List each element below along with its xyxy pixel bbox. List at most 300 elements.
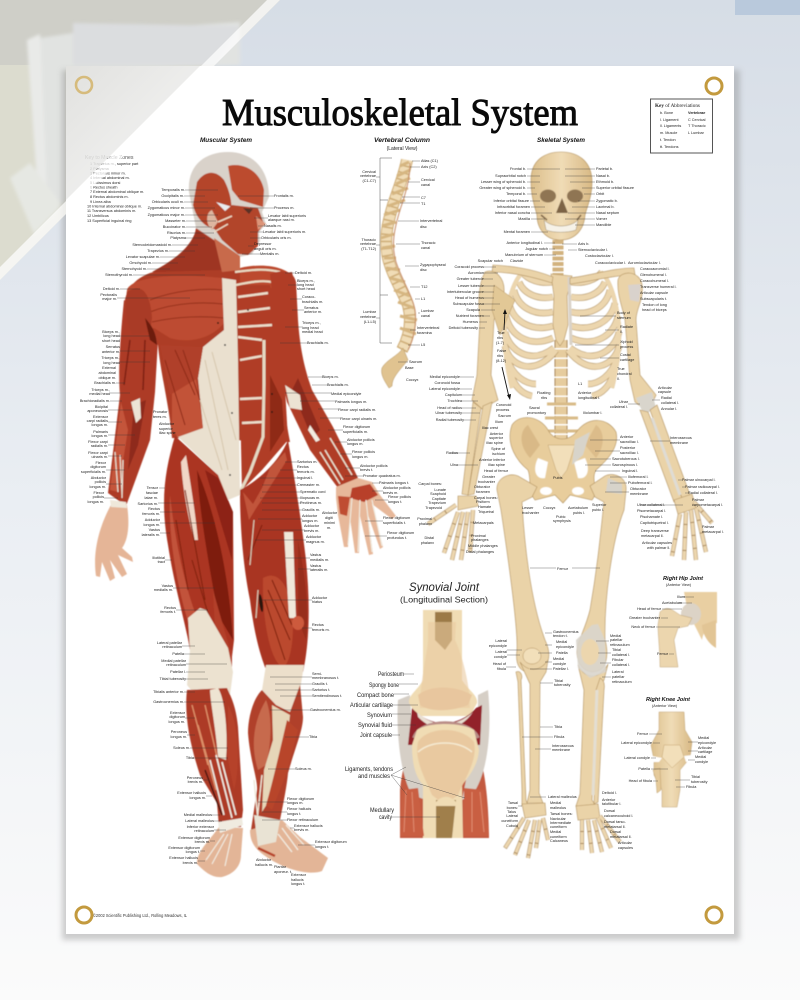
muscular labels: right column: Gastrocnemius m. xyxy=(310,708,341,712)
knee labels: cartilage xyxy=(698,750,712,754)
skeleton labels: Infraorbital foramen xyxy=(497,205,530,209)
muscular labels: left column: Brachioradialis m. xyxy=(80,399,110,403)
skeleton labels: collateral l. xyxy=(612,653,630,657)
muscular labels: right column: Adductor xyxy=(306,535,322,539)
skeleton labels: iliac spine xyxy=(486,441,503,445)
skeleton labels: head of biceps xyxy=(642,308,667,312)
skeleton labels: Maxilla xyxy=(518,217,531,221)
muscular labels: right column: Palmaris longus m. xyxy=(335,400,367,404)
muscular labels: left column: Sternohyoid m. xyxy=(121,267,147,271)
muscular labels: right column: Abductor pollicis xyxy=(347,438,375,442)
muscular labels: left column: femoris m. xyxy=(142,512,160,516)
muscular labels: left column: Patella xyxy=(172,652,185,656)
key of abbreviations: Key of Abbreviations xyxy=(655,102,700,109)
muscular labels: right column: aponeur. t. xyxy=(274,870,292,874)
skeleton labels: Coracoid process xyxy=(454,265,484,269)
skeleton labels: Distal phalanges xyxy=(466,550,494,554)
muscular labels: right column: Palmaris longus t. xyxy=(379,481,409,485)
key to muscle zones: 2 Platysma xyxy=(90,167,110,171)
skeleton labels: Anterior xyxy=(578,391,592,395)
right lower leg bones xyxy=(576,624,620,853)
skeleton labels: Radiate xyxy=(620,325,633,329)
skeleton labels: Dorsal xyxy=(604,809,615,813)
skeleton labels: Pubis xyxy=(553,476,563,480)
skeleton labels: with palmar ll. xyxy=(647,546,670,550)
muscular labels: right column: Rectus xyxy=(297,465,309,469)
muscular labels: left column: Flexor xyxy=(95,461,107,465)
muscular labels: left column: fasciae xyxy=(146,491,158,495)
spine labels: canal xyxy=(421,183,430,187)
key of abbreviations: tt. Tendons xyxy=(660,145,679,149)
skeleton labels: Sacral xyxy=(529,406,540,410)
muscular labels: right column: Flexor digitorum xyxy=(383,516,410,520)
muscular labels: right column: superficialis m. xyxy=(343,430,368,434)
knee labels: Patella xyxy=(638,767,651,771)
skeleton labels: phalanx xyxy=(421,541,434,545)
skeleton labels: Anterior inferior xyxy=(479,458,506,462)
muscular labels: left column: Platysma xyxy=(170,236,187,240)
skeleton labels: Deltoid l. xyxy=(602,791,617,795)
muscular labels: left column: superior xyxy=(159,427,173,431)
skeleton labels: phalanges xyxy=(471,538,489,542)
skeleton labels: Nasal b. xyxy=(596,174,610,178)
muscular labels: right column: hiatus xyxy=(312,600,322,604)
muscular labels: right column: alaeque nasi m. xyxy=(268,218,295,222)
synovial labels: and muscles xyxy=(358,773,390,780)
skeleton labels: Ulnar tuberosity xyxy=(435,411,462,415)
skeleton labels: Axis b. xyxy=(578,242,589,246)
muscular labels: right column: femoris m. xyxy=(297,470,315,474)
skeleton labels: cartilage xyxy=(620,358,634,362)
skeleton labels: Lateral xyxy=(495,650,507,654)
skeleton labels: Medial xyxy=(556,640,567,644)
muscular labels: left column: Buccinator m. xyxy=(163,225,186,229)
skeleton labels: Lacrimal b. xyxy=(596,205,615,209)
muscular labels: left column: Medial patellar xyxy=(161,659,187,663)
skeleton labels: Interosseous xyxy=(552,744,574,748)
muscular labels: left column: longus m. xyxy=(92,434,108,438)
muscular labels: right column: profundus t. xyxy=(387,536,407,540)
muscular labels: right column: Levator labii superioris xyxy=(268,214,306,218)
skeleton labels: Iliofemoral l. xyxy=(628,475,648,479)
skeleton labels: Lateral xyxy=(495,639,507,643)
top-left translucent sheet overlay xyxy=(66,66,200,200)
muscular labels: right column: Triceps m., xyxy=(302,321,321,325)
skeleton labels: Mental foramen xyxy=(504,230,530,234)
muscular labels: right column: anterior m. xyxy=(304,310,322,314)
skeleton labels: Patellar l. xyxy=(553,667,569,671)
hip labels: Ilium xyxy=(677,595,685,599)
muscular labels: left column: Lateral malleolus xyxy=(185,819,214,823)
synovial labels: Articular cartilage xyxy=(350,702,393,709)
skeleton labels xyxy=(417,167,724,850)
muscular labels: right column: Flexor hallucis xyxy=(287,807,311,811)
muscular labels: left column: major m. xyxy=(102,297,117,301)
skeleton labels: Lateral epicondyle xyxy=(429,387,460,391)
grommet: bottom right xyxy=(706,907,722,923)
skeleton labels: Capitulum xyxy=(445,393,462,397)
muscular labels: left column: ulnaris m. xyxy=(92,455,108,459)
key to muscle zones: 7 External abdominal oblique m. xyxy=(90,190,144,194)
skeleton labels: Medial xyxy=(550,801,561,805)
skeleton labels: Hamate xyxy=(478,505,491,509)
skeleton labels: Obturator xyxy=(474,485,491,489)
skeleton labels: talofibular l. xyxy=(602,802,621,806)
skeleton labels: Ilium xyxy=(495,420,503,424)
skeleton labels: foramen xyxy=(476,490,490,494)
muscular labels: right column: m. xyxy=(327,526,331,530)
abdominal muscles xyxy=(160,288,288,490)
skeleton labels: Superior orbital fissure xyxy=(596,186,634,190)
skeleton labels: phalanx xyxy=(419,522,432,526)
knee labels: Tibial xyxy=(691,775,700,779)
muscular labels: left column: abdominal xyxy=(98,371,116,375)
muscular labels: right column: magnus m. xyxy=(306,540,325,544)
skeleton labels: metacarpal ll. xyxy=(641,534,664,538)
skeleton labels: Zygomatic b. xyxy=(596,199,618,203)
skeleton labels: symphysis xyxy=(553,519,571,523)
skeleton labels: Nasal septum xyxy=(596,211,619,215)
muscular labels: left column: Omohyoid m. xyxy=(129,261,152,265)
skeleton labels: Spine of xyxy=(491,447,506,451)
skeleton labels: Pisometacarpal l. xyxy=(637,509,666,513)
skeleton labels: Tarsal bones: xyxy=(550,812,573,816)
muscular labels: left column: Rectus xyxy=(148,507,160,511)
muscular labels: right column: longus t. xyxy=(388,500,402,504)
muscular labels: left column: iliac spine xyxy=(159,431,176,435)
skeleton labels: Head of femur xyxy=(484,469,509,473)
muscular labels: left column: teres m. xyxy=(153,415,167,419)
muscular labels: left column: Triceps m., xyxy=(91,388,110,392)
muscular labels: left column: longus m. xyxy=(92,423,108,427)
synovial heading: Synovial Joint xyxy=(409,580,480,594)
muscular labels: right column: brevis m. xyxy=(304,529,319,533)
muscular labels: left column: latae m. xyxy=(144,496,158,500)
skeleton labels: Manubrium of sternum xyxy=(505,253,543,257)
muscular labels: left column: Tibia xyxy=(186,756,195,760)
key to muscle zones: 10 Internal abdominal oblique m. xyxy=(87,204,142,208)
muscular labels: right column: digiti xyxy=(325,516,333,520)
skeleton labels: Articular capsules xyxy=(642,541,672,545)
muscular labels: right column: membranosus t. xyxy=(312,676,339,680)
knee labels: Lateral condyle xyxy=(624,756,650,760)
muscular labels: right column: longus t. xyxy=(315,845,329,849)
muscular labels: right column: Medial epicondyle xyxy=(331,392,361,396)
muscular labels: left column: Masseter m. xyxy=(165,219,186,223)
left thigh xyxy=(164,436,234,680)
rib arrows xyxy=(502,309,511,400)
muscular labels: left column: Extensor digitorum xyxy=(168,846,200,850)
key of abbreviations: m. Muscle xyxy=(660,131,677,135)
skeleton labels: Capitate xyxy=(432,497,446,501)
muscular labels: left column: long head xyxy=(103,361,120,365)
skeleton labels: (1-7) xyxy=(496,341,505,345)
key of abbreviations: L Lumbar xyxy=(688,131,705,135)
skeleton labels: (8-12) xyxy=(496,359,507,363)
skeleton labels: Inferior nasal concha xyxy=(495,211,531,215)
muscular labels: right column: medialis m. xyxy=(310,558,329,562)
muscular labels: left column: Iliotibial xyxy=(152,556,165,560)
muscular labels: left column: tract xyxy=(158,560,166,564)
muscular labels: left column: Lateral patellar xyxy=(157,641,183,645)
synovial joint xyxy=(345,580,489,838)
skeleton labels: trochanter xyxy=(478,480,496,484)
muscular labels: left column: digitorum xyxy=(169,715,185,719)
skeleton labels: Lateral xyxy=(506,814,518,818)
skeleton labels: ribs xyxy=(497,354,503,358)
spine labels: T1 xyxy=(421,202,425,206)
muscular labels: left column: pollicis xyxy=(93,495,104,499)
spine labels: canal xyxy=(421,246,430,250)
muscular labels: left column: Extensor hallucis xyxy=(169,856,198,860)
muscular labels: left column: Orbicularis oculi m. xyxy=(152,200,184,204)
muscular labels: left column: Patellar l. xyxy=(170,670,186,674)
skeleton labels: Navicular xyxy=(550,817,567,821)
skeleton labels: Costal xyxy=(620,353,631,357)
skeleton labels: Sternoclavicular l. xyxy=(578,248,608,252)
spine labels: T12 xyxy=(421,285,428,289)
skeleton labels: Radial collateral l. xyxy=(688,491,718,495)
heading: vertebral column: (Lateral View) xyxy=(387,146,418,152)
left arm bones xyxy=(428,271,515,560)
skeleton labels: Dorsal tarso- xyxy=(604,820,626,824)
skeleton labels: Patella xyxy=(556,651,568,655)
right arm bones xyxy=(618,273,712,560)
skeletal system figure xyxy=(428,152,712,858)
muscular labels: left column: longus m. xyxy=(144,523,160,527)
key of abbreviations: l. Ligament xyxy=(660,118,680,122)
muscular labels: right column: Frontalis m. xyxy=(274,194,294,198)
grommet: top right xyxy=(706,78,722,94)
knee labels: epicondyle xyxy=(698,741,716,745)
muscular labels: right column: Flexor digitorum xyxy=(387,531,414,535)
spine labels: Coccyx xyxy=(406,378,419,382)
muscular labels: left column: retinaculum xyxy=(166,663,186,667)
muscular labels: right column: Flexor digitorum xyxy=(287,797,314,801)
muscular labels: left column: longus m. xyxy=(190,796,206,800)
muscular labels: right column: Brachialis m. xyxy=(307,341,329,345)
synovial labels: Medullary xyxy=(370,807,395,814)
skeleton labels: longitudinal l. xyxy=(578,396,600,400)
skeleton labels: Vomer xyxy=(596,217,608,221)
skeleton labels: Medial xyxy=(550,830,561,834)
muscular labels: left column: retinaculum xyxy=(194,829,214,833)
synovial labels: Compact bone xyxy=(357,692,395,699)
muscular labels: left column: Trapezius m. xyxy=(147,249,169,253)
skeleton labels: Medial xyxy=(610,634,621,638)
skeleton labels: capsule xyxy=(658,390,671,394)
skeleton labels: True xyxy=(617,367,625,371)
skeleton labels: Scaphoid xyxy=(430,492,446,496)
muscular labels: right column: Flexor pollicis xyxy=(352,450,375,454)
right knee joint xyxy=(621,697,716,807)
skeleton labels: cuneiform xyxy=(550,825,567,829)
muscular labels: left column: longus t. xyxy=(186,850,200,854)
skeleton labels: metatarsal ll. xyxy=(610,835,632,839)
skeleton labels: Articular capsule xyxy=(640,291,668,295)
skeleton labels: membrane xyxy=(670,441,688,445)
skeleton labels: process xyxy=(496,408,509,412)
skeleton labels: Distal xyxy=(424,536,434,540)
muscular labels: right column: Gracilis m. xyxy=(302,508,320,512)
pelvis xyxy=(510,418,617,503)
spine labels: Cervical xyxy=(421,178,435,182)
spine labels: Lumbar xyxy=(363,310,377,314)
skeleton labels: sacroiliac l. xyxy=(620,440,639,444)
skeleton labels: Greater xyxy=(482,475,496,479)
muscular labels: right column: Brachialis m. xyxy=(327,383,349,387)
muscular labels: left column: Biceps m., xyxy=(102,330,120,334)
bracket xyxy=(380,158,392,343)
spine labels: Atlas (C1) xyxy=(421,159,439,163)
skeleton labels: Costoclavicular l. xyxy=(585,254,614,258)
knee labels: Articular xyxy=(698,746,713,750)
muscular labels: right column: brevis m. xyxy=(383,491,398,495)
skeleton labels: False xyxy=(497,349,506,353)
skeleton labels: Subscapularis t. xyxy=(640,297,667,301)
muscular labels: left column: External xyxy=(102,366,116,370)
title: Musculoskeletal System xyxy=(222,92,578,134)
muscular labels: right column: longus m. xyxy=(302,519,318,523)
muscular labels: left column: longus m. xyxy=(169,720,185,724)
synovial labels: Synovium xyxy=(367,712,392,719)
skeleton labels: Pisiform xyxy=(476,500,490,504)
heading: vertebral column: Vertebral Column xyxy=(374,137,430,144)
muscular labels: right column: longus t. xyxy=(291,882,305,886)
skeleton labels: Sacrum xyxy=(498,414,511,418)
key to muscle zones: 13 Superficial inguinal ring xyxy=(87,219,132,223)
muscular labels: left column: superficialis m. xyxy=(81,470,106,474)
muscular labels: right column: Deltoid m. xyxy=(295,271,312,275)
skeleton labels: Proximal xyxy=(417,517,432,521)
spine labels: Base xyxy=(405,366,414,370)
skeleton labels: trochanter xyxy=(522,511,540,515)
muscular labels: left column: Abductor xyxy=(91,476,107,480)
muscular labels: right column: Coraco- xyxy=(302,295,316,299)
skeleton labels: Pubofemoral l. xyxy=(628,481,652,485)
skeleton labels: pubic l. xyxy=(592,508,604,512)
muscular labels: left column: Flexor carpi xyxy=(88,440,108,444)
spine labels: C7 xyxy=(421,196,426,200)
muscular labels: left column: Pectoralis xyxy=(100,293,117,297)
muscular labels: right column: Cremaster m. xyxy=(297,483,320,487)
muscular labels: left column: carpi radialis xyxy=(87,419,108,423)
muscular labels: right column: long head xyxy=(297,283,314,287)
muscular labels: right column: femoris m. xyxy=(312,628,330,632)
skeleton labels: membrane xyxy=(630,492,648,496)
muscular system figure xyxy=(95,152,396,877)
skeleton labels: fibula xyxy=(497,667,507,671)
muscular labels: right column: Extensor digitorum xyxy=(315,840,347,844)
spine labels: Zygapophyseal xyxy=(420,263,446,267)
skeleton labels: Lesser tubercle xyxy=(458,284,484,288)
skeleton labels: Intermediate xyxy=(550,821,571,825)
skeleton labels: Scapula xyxy=(466,308,481,312)
muscular labels: left column: Zygomaticus major m. xyxy=(148,213,185,217)
spine labels xyxy=(360,159,446,382)
hip heading: Right Hip Joint xyxy=(663,576,704,582)
skeleton labels: Posterior xyxy=(620,446,636,450)
right hip joint xyxy=(629,576,717,667)
skeleton labels: Superior xyxy=(592,503,607,507)
key to muscle zones: 12 Umbilicus xyxy=(87,214,109,218)
skeleton labels: Medial xyxy=(553,657,564,661)
skeleton labels: bones: xyxy=(507,806,518,810)
hip labels: Greater trochanter xyxy=(629,616,661,620)
muscular labels: left column: Triceps m., xyxy=(101,356,120,360)
muscular labels: left column: Zygomaticus minor m. xyxy=(148,206,185,210)
muscular labels: right column: Abductor xyxy=(322,511,338,515)
skeleton labels: tuberosity xyxy=(554,683,571,687)
spine xyxy=(381,160,417,388)
knee labels: Medial xyxy=(698,736,709,740)
muscular labels: right column: Biceps m., xyxy=(297,279,315,283)
knee labels: Femur xyxy=(637,732,649,736)
hip leader lines xyxy=(656,597,694,654)
skeleton labels: Coracoacromial l. xyxy=(640,267,670,271)
muscular labels: left column: Vastus xyxy=(149,528,160,532)
muscular labels: left column: Extensor hallucis xyxy=(177,791,206,795)
muscular labels: left column: radialis m. xyxy=(91,444,108,448)
muscular labels: right column: Mentalis m. xyxy=(260,252,279,256)
spine labels: Intervertebral xyxy=(420,219,443,223)
muscular labels: left column: Adductor xyxy=(145,518,161,522)
spine labels: disc xyxy=(420,268,427,272)
muscular labels: left column: aponeurosis xyxy=(87,409,108,413)
synovial labels: Periosteum xyxy=(378,671,404,678)
skeleton labels: epicondyle xyxy=(489,644,507,648)
key of abbreviations: t. Tendon xyxy=(660,138,676,142)
skeleton labels: Floating xyxy=(537,391,551,395)
spine labels: (L1-L5) xyxy=(364,320,377,324)
muscular labels: right column: Semitendinosus t. xyxy=(312,694,342,698)
skeleton labels: Fibular xyxy=(612,658,624,662)
skeleton labels: pubis l. xyxy=(573,511,585,515)
muscular labels: right column: Iliopsoas m. xyxy=(300,496,320,500)
muscular labels: right column: Levator labii superioris m. xyxy=(263,230,306,234)
synovial leader lines xyxy=(391,674,465,817)
skeleton labels: sternum xyxy=(617,316,631,320)
muscular labels: right column: Flexor carpi radialis m. xyxy=(338,408,376,412)
skeleton labels: Head of xyxy=(493,662,507,666)
skeleton labels: Coracoclavicular l. xyxy=(595,261,626,265)
skeleton labels: Interosseous xyxy=(670,436,692,440)
skeleton labels: Tibial xyxy=(554,679,563,683)
skeleton labels: Coracohumeral l. xyxy=(640,279,669,283)
muscular labels: right column: Flexor carpi ulnaris m. xyxy=(340,417,377,421)
heading: vertebral column xyxy=(374,137,430,152)
skeleton labels: Carpal bones: xyxy=(474,496,498,500)
skeleton labels: ribs xyxy=(497,336,503,340)
key to muscle zones: 11 Transversus abdominis m. xyxy=(87,209,136,213)
hip diagram xyxy=(658,592,717,667)
skeleton labels: Sacrotuberous l. xyxy=(612,457,640,461)
muscular labels: right column: minimi xyxy=(324,521,335,525)
muscular labels: left column: Extensor digitorum xyxy=(178,836,210,840)
muscular labels: left column: digitorum xyxy=(90,465,106,469)
skeleton labels: metacarpal l. xyxy=(702,530,724,534)
right thigh xyxy=(240,440,309,672)
knee labels: Head of fibula xyxy=(629,779,653,783)
skeleton labels: Articular xyxy=(618,841,633,845)
hip labels xyxy=(629,595,685,656)
knee labels xyxy=(621,732,716,789)
skeleton labels: Frontal b. xyxy=(510,167,526,171)
muscular labels: right column: Nasalis m. xyxy=(264,224,282,228)
muscular labels: right column: short head xyxy=(297,287,315,291)
muscular labels: right column xyxy=(254,194,414,886)
spine labels: Sacrum xyxy=(409,360,422,364)
